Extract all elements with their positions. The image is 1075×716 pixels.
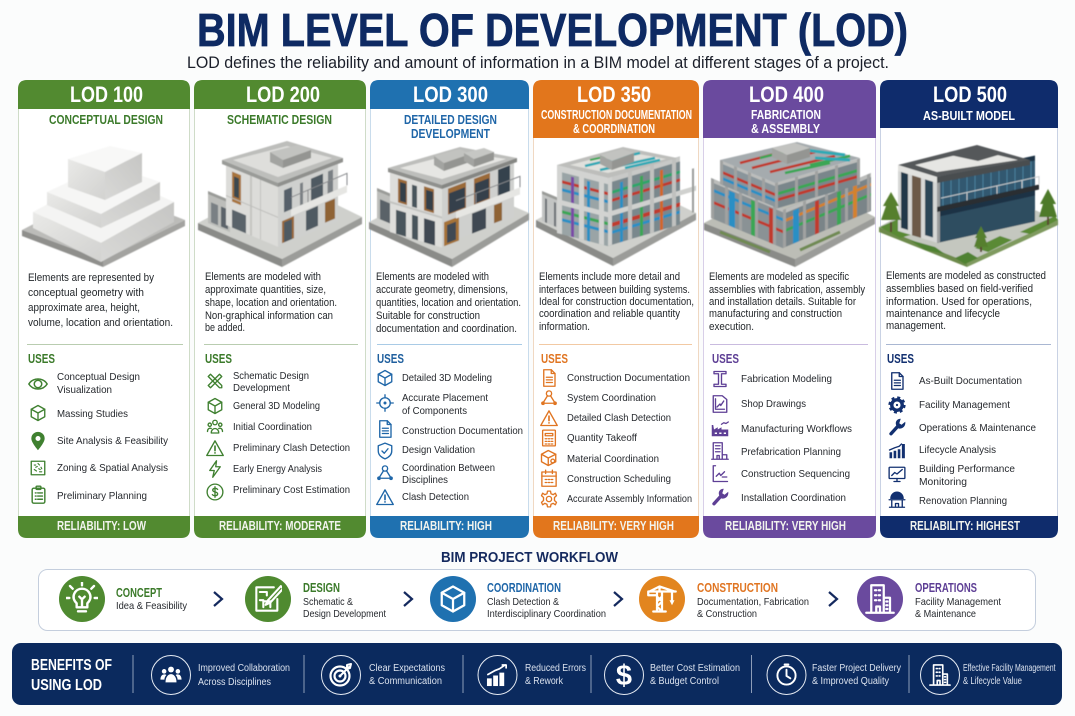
- description: coordination and reliable quantity: [539, 308, 681, 320]
- subtitle: LOD defines the reliability and amount of information in a BIM model at different stages of a project.: [187, 54, 889, 72]
- header: LOD 500: AS-BUILT MODEL: [923, 108, 1015, 123]
- benefit: collaboration: [152, 656, 290, 694]
- use: preliminary planning: [32, 486, 147, 503]
- header: LOD 100: LOD 100: [70, 82, 143, 107]
- panel: LOD 100: [18, 80, 190, 538]
- description: [376, 271, 521, 335]
- use: preliminary planning: Preliminary Planning: [57, 491, 147, 502]
- description: [709, 271, 866, 333]
- description: interfaces between building systems.: [539, 284, 690, 296]
- header: LOD 400: FABRICATION: [751, 107, 821, 122]
- reliability bar: RELIABILITY: LOW: [57, 519, 146, 533]
- use: site analysis: Site Analysis & Feasibility: [57, 436, 169, 447]
- description: information. Used for operations,: [886, 296, 1032, 308]
- header: LOD 350: CONSTRUCTION DOCUMENTATION: [541, 107, 692, 122]
- uses list: [889, 373, 1036, 507]
- reliability bar: [18, 516, 190, 538]
- description: Non-graphical information can: [205, 310, 333, 322]
- header: LOD 300: [370, 80, 529, 109]
- benefits heading: [31, 657, 112, 694]
- description: [205, 271, 337, 334]
- use: zoning: [31, 461, 168, 475]
- use: conceptual design visualization: [29, 372, 140, 396]
- use: construction documentation: Construction Documentation: [402, 426, 523, 437]
- use: construction documentation: [544, 370, 690, 386]
- step: operations: [857, 576, 1001, 622]
- description: [539, 271, 694, 333]
- description: Suitable for construction: [376, 310, 480, 322]
- use: construction scheduling: [542, 470, 671, 486]
- use: initial coordination: Initial Coordination: [233, 422, 312, 433]
- use: massing studies: [31, 406, 128, 420]
- use: quantity takeoff: Quantity Takeoff: [567, 433, 637, 444]
- benefit: collaboration: Across Disciplines: [198, 677, 271, 688]
- benefit: facility management: & Lifecycle Value: [963, 676, 1022, 687]
- uses list: [712, 372, 852, 504]
- use: facility management: Facility Management: [919, 400, 1010, 411]
- panel: LOD 300: [369, 80, 529, 538]
- step: coordination: [430, 576, 606, 622]
- header: LOD 400: & ASSEMBLY: [751, 121, 820, 136]
- step: coordination: Clash Detection &: [487, 597, 559, 608]
- panel: workflow: [38, 570, 1036, 630]
- use: building performance monitoring: [889, 464, 1015, 488]
- image: massing model: [22, 146, 185, 267]
- benefit: cost estimation: Better Cost Estimation: [650, 663, 740, 674]
- step: design: DESIGN: [303, 581, 340, 595]
- description: maintenance and lifecycle: [886, 308, 1000, 320]
- header: LOD 200: LOD 200: [246, 82, 320, 107]
- uses heading: USES: [887, 352, 914, 366]
- use: detailed 3d modeling: [378, 370, 492, 386]
- panel: LOD 350: [533, 80, 699, 538]
- step: coordination: Interdisciplinary Coordination: [487, 609, 606, 620]
- header: LOD 350: & COORDINATION: [573, 121, 655, 136]
- uses list: [377, 370, 523, 504]
- reliability bar: RELIABILITY: HIGH: [400, 519, 492, 533]
- description: Elements are modeled as constructed: [886, 270, 1046, 282]
- benefit: faster delivery: & Improved Quality: [812, 676, 889, 687]
- use: building performance monitoring: Monitoring: [919, 477, 967, 488]
- step: design: Design Development: [303, 609, 386, 620]
- use: massing studies: Massing Studies: [57, 409, 128, 420]
- use: design validation: Design Validation: [402, 445, 475, 456]
- use: clash detection: [377, 490, 469, 504]
- description: Elements are modeled with: [376, 271, 489, 283]
- uses heading: USES: [541, 352, 568, 366]
- uses heading: USES: [205, 352, 232, 366]
- description: [28, 272, 173, 329]
- step: operations: OPERATIONS: [915, 581, 977, 595]
- use: early energy analysis: Early Energy Analysis: [233, 464, 322, 475]
- use: accurate assembly information: Accurate Assembly Information: [567, 494, 692, 505]
- header: LOD 300: LOD 300: [413, 82, 488, 107]
- image: schematic building: [198, 141, 362, 267]
- image: as-built building: [879, 145, 1058, 267]
- arrow: [829, 592, 837, 606]
- description: Elements are modeled with: [205, 271, 321, 283]
- header: LOD 350: [533, 80, 699, 138]
- panel: benefits: [12, 643, 1062, 705]
- use: accurate assembly information: [542, 491, 692, 507]
- use: material coordination: Material Coordination: [567, 454, 659, 465]
- use: fabrication modeling: [714, 372, 832, 386]
- uses heading: USES: [712, 352, 739, 366]
- use: construction scheduling: Construction Scheduling: [567, 474, 671, 485]
- benefit: cost estimation: & Budget Control: [650, 676, 719, 687]
- use: zoning: Zoning & Spatial Analysis: [57, 463, 168, 474]
- panel: LOD 500: [879, 80, 1058, 538]
- use: initial coordination: [208, 420, 312, 433]
- use: early energy analysis: [210, 461, 322, 477]
- reliability bar: [880, 516, 1058, 538]
- use: general 3d modeling: [208, 398, 320, 414]
- benefit: cost estimation: $: [616, 660, 632, 692]
- stage name: [404, 112, 497, 141]
- description: Ideal for construction documentation,: [539, 296, 694, 308]
- use: lifecycle analysis: [890, 444, 996, 458]
- icon: tree: [881, 192, 901, 232]
- use: as-built documentation: [892, 373, 1022, 389]
- use: as-built documentation: As-Built Documentation: [919, 376, 1022, 387]
- use: operations and maintenance: Operations & Maintenance: [919, 423, 1036, 434]
- use: installation coordination: [714, 489, 846, 504]
- use: shop drawings: [713, 396, 806, 412]
- use: material coordination: [542, 450, 659, 466]
- image: building with MEP systems: [536, 147, 696, 266]
- use: conceptual design visualization: Conceptual Design: [57, 372, 140, 383]
- use: system coordination: System Coordination: [567, 393, 656, 404]
- description: execution.: [709, 321, 754, 333]
- description: be added.: [205, 322, 245, 334]
- step: construction: [639, 576, 809, 622]
- use: coordination between disciplines: Coordination Between: [402, 463, 495, 474]
- benefit: expectations: [322, 656, 445, 694]
- header: LOD 200: [194, 80, 366, 109]
- description: and installation details. Suitable for: [709, 296, 856, 308]
- description: assemblies based on field-verified: [886, 283, 1033, 295]
- use: schematic design development: Development: [233, 383, 290, 394]
- benefit: collaboration: Improved Collaboration: [198, 663, 290, 674]
- use: coordination between disciplines: Disciplines: [402, 475, 448, 486]
- arrow: [614, 592, 622, 606]
- use: detailed 3d modeling: Detailed 3D Modeling: [402, 373, 492, 384]
- reliability bar: RELIABILITY: HIGHEST: [910, 519, 1020, 533]
- step: operations: Facility Management: [915, 597, 1001, 608]
- reliability bar: [533, 516, 699, 538]
- step: operations: & Maintenance: [915, 609, 976, 620]
- step: concept: CONCEPT: [116, 586, 162, 600]
- description: volume, location and orientation.: [28, 317, 173, 329]
- step: construction: Documentation, Fabrication: [697, 597, 809, 608]
- arrow: [214, 592, 222, 606]
- use: prefabrication planning: [712, 443, 841, 459]
- use: operations and maintenance: [891, 419, 1036, 434]
- description: Elements include more detail and: [539, 271, 680, 283]
- use: preliminary cost estimation: Preliminary Cost Estimation: [233, 485, 350, 496]
- description: documentation and coordination.: [376, 323, 517, 335]
- icon: tree: [1039, 189, 1057, 225]
- benefit: facility management: [920, 656, 1056, 694]
- description: [886, 270, 1046, 332]
- use: construction documentation: [380, 421, 523, 437]
- stage name: DETAILED DESIGN: [404, 112, 497, 127]
- reliability bar: [194, 516, 366, 538]
- use: accurate placement: [377, 393, 488, 417]
- description: shape, location and orientation.: [205, 297, 337, 309]
- image: detailed building: [369, 147, 529, 267]
- benefits heading: USING LOD: [31, 677, 102, 694]
- use: detailed clash detection: Detailed Clash Detection: [567, 413, 671, 424]
- use: fabrication modeling: Fabrication Modeling: [741, 374, 832, 385]
- header: LOD 500: [880, 80, 1058, 128]
- stage name: DEVELOPMENT: [411, 126, 490, 141]
- benefit: reduced errors: Reduced Errors: [525, 663, 586, 674]
- uses list: [29, 372, 169, 503]
- description: management.: [886, 320, 946, 332]
- use: shop drawings: Shop Drawings: [741, 399, 806, 410]
- use: lifecycle analysis: Lifecycle Analysis: [919, 445, 996, 456]
- step: design: [245, 576, 386, 622]
- step: coordination: COORDINATION: [487, 581, 561, 595]
- benefit: cost estimation: [604, 656, 740, 694]
- use: construction sequencing: [713, 466, 850, 482]
- use: detailed clash detection: [541, 411, 671, 426]
- description: accurate geometry, dimensions,: [376, 284, 508, 296]
- use: schematic design development: Schematic Design: [233, 371, 309, 382]
- step: concept: [59, 576, 188, 622]
- header: LOD 500: LOD 500: [933, 82, 1007, 107]
- icon: tree: [974, 226, 988, 252]
- use: clash detection: Clash Detection: [402, 492, 469, 503]
- use: manufacturing workflows: [712, 422, 852, 436]
- benefit: faster delivery: [767, 656, 901, 694]
- use: system coordination: [541, 391, 656, 405]
- title: BIM LEVEL OF DEVELOPMENT (LOD): [197, 4, 908, 56]
- benefit: faster delivery: Faster Project Delivery: [812, 663, 901, 674]
- use: accurate placement: of Components: [402, 406, 467, 417]
- use: renovation planning: Renovation Planning: [919, 496, 1007, 507]
- uses list: [207, 371, 350, 500]
- step: concept: Idea & Feasibility: [116, 601, 188, 612]
- stage name: SCHEMATIC DESIGN: [227, 112, 332, 127]
- use: installation coordination: Installation Coordination: [741, 493, 846, 504]
- use: facility management: [890, 398, 1010, 412]
- reliability bar: RELIABILITY: VERY HIGH: [553, 519, 674, 533]
- use: construction documentation: Construction Documentation: [567, 373, 690, 384]
- step: construction: & Construction: [697, 609, 757, 620]
- reliability bar: RELIABILITY: MODERATE: [219, 519, 341, 533]
- description: Elements are represented by: [28, 272, 155, 284]
- step: construction: CONSTRUCTION: [697, 581, 778, 595]
- description: manufacturing and construction: [709, 308, 842, 320]
- image: steel frame with assemblies: [704, 142, 875, 267]
- use: renovation planning: [889, 492, 1007, 507]
- use: quantity takeoff: [543, 430, 637, 446]
- use: schematic design development: [208, 371, 309, 394]
- reliability bar: RELIABILITY: VERY HIGH: [725, 519, 846, 533]
- use: manufacturing workflows: Manufacturing Workflows: [741, 424, 852, 435]
- uses heading: USES: [377, 352, 404, 366]
- use: accurate placement: Accurate Placement: [402, 393, 488, 404]
- stage name: CONCEPTUAL DESIGN: [49, 112, 163, 127]
- use: design validation: [378, 443, 475, 459]
- use: site analysis: [31, 432, 169, 450]
- description: conceptual geometry with: [28, 287, 144, 299]
- arrow: [404, 592, 412, 606]
- panel: LOD 400: [703, 80, 876, 538]
- benefit: expectations: & Communication: [369, 676, 442, 687]
- header: LOD 100: [18, 80, 190, 109]
- use: conceptual design visualization: Visualization: [57, 385, 112, 396]
- description: Elements are modeled as specific: [709, 271, 850, 283]
- uses heading: USES: [28, 352, 55, 366]
- description: approximate area, height,: [28, 302, 140, 314]
- use: coordination between disciplines: [377, 463, 495, 486]
- use: preliminary clash detection: Preliminary Clash Detection: [233, 443, 350, 454]
- workflow heading: BIM PROJECT WORKFLOW: [441, 550, 618, 566]
- benefits heading: BENEFITS OF: [31, 657, 112, 674]
- reliability bar: [370, 516, 529, 538]
- description: quantities, location and orientation.: [376, 297, 521, 309]
- header: LOD 400: [703, 80, 876, 138]
- benefit: expectations: Clear Expectations: [369, 663, 445, 674]
- use: prefabrication planning: Prefabrication Planning: [741, 447, 841, 458]
- description: assemblies with fabrication, assembly: [709, 284, 866, 296]
- use: preliminary cost estimation: [207, 484, 350, 500]
- header: LOD 350: LOD 350: [577, 82, 651, 107]
- benefit: reduced errors: [478, 656, 586, 694]
- header: LOD 400: LOD 400: [749, 82, 824, 107]
- use: preliminary clash detection: [207, 441, 350, 456]
- panel: LOD 200: [194, 80, 366, 538]
- description: information.: [539, 321, 590, 333]
- step: design: Schematic &: [303, 597, 353, 608]
- use: building performance monitoring: Building Performance: [919, 464, 1015, 475]
- uses list: [541, 370, 692, 507]
- use: general 3d modeling: General 3D Modeling: [233, 401, 320, 412]
- use: construction sequencing: Construction Sequencing: [741, 469, 850, 480]
- benefit: reduced errors: & Rework: [525, 676, 564, 687]
- reliability bar: [703, 516, 876, 538]
- description: approximate quantities, size,: [205, 284, 326, 296]
